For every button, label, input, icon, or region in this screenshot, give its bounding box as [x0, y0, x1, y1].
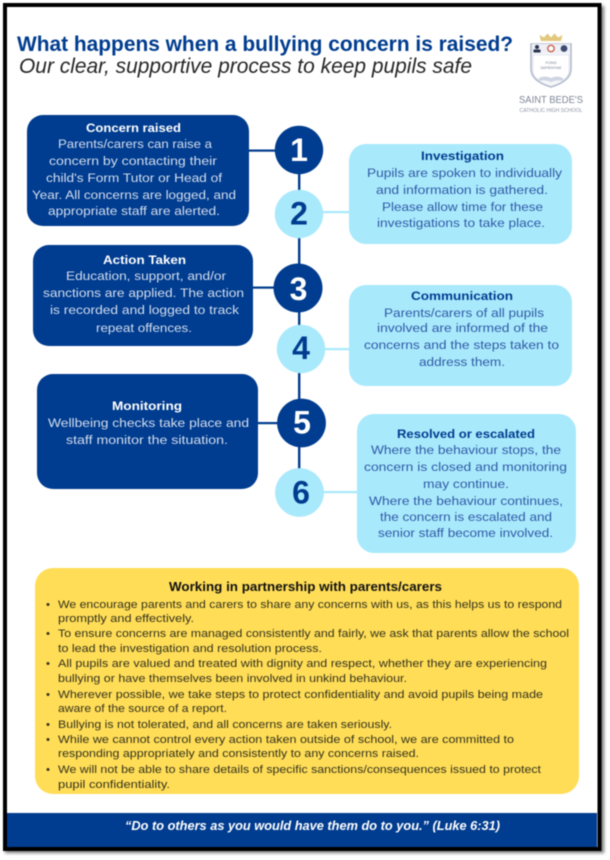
panel: resolved or escalated: Where the behaviour stops, the: [371, 443, 561, 457]
step 4: 4: [292, 330, 310, 366]
step 4: [277, 325, 325, 373]
partnership bullet list: Bullying is not tolerated, and all concerns are taken seriously.: [58, 719, 392, 731]
panel: concern raised: [27, 115, 249, 226]
school logo: [519, 34, 583, 114]
partnership bullet list: bullying or have themselves been involved in unkind behaviour.: [58, 673, 407, 685]
partnership bullet list: pupil confidentiality.: [58, 779, 170, 791]
panel: resolved or escalated: concern is closed and monitoring: [364, 460, 567, 474]
partnership bullet list: We will not be able to share details of specific sanctions/consequences issued to protect: [58, 764, 542, 776]
partnership bullet list: •: [46, 764, 50, 776]
partnership bullet list: Wherever possible, we take steps to protect confidentiality and avoid pupils being made: [58, 689, 543, 701]
partnership bullet list: to lead the investigation and resolution process.: [58, 643, 322, 655]
panel: communication: Communication: [411, 289, 513, 303]
step 3: 3: [290, 271, 307, 307]
partnership bullet list: •: [46, 734, 50, 746]
partnership bullet list: •: [46, 719, 50, 731]
step 2: [275, 190, 323, 238]
panel: monitoring: Monitoring: [112, 399, 182, 413]
partnership bullet list: •: [46, 658, 50, 670]
panel: concern raised: Year. All concerns are logged, and: [32, 188, 236, 202]
step 1: [275, 126, 323, 174]
panel: monitoring: Wellbeing checks take place and: [48, 416, 249, 430]
panel: resolved or escalated: [357, 414, 576, 553]
panel: communication: address them.: [419, 355, 505, 369]
partnership bullet list: responding appropriately and consistently to any concerns raised.: [58, 748, 419, 760]
step 1: 1: [290, 132, 308, 168]
panel: action taken: Education, support, and/or: [66, 269, 226, 283]
step 6: 6: [292, 474, 310, 510]
panel: concern raised: appropriate staff are alerted.: [48, 204, 220, 218]
partnership bullet list: aware of the source of a report.: [58, 703, 227, 715]
partnership bullet list: •: [46, 689, 50, 701]
subtitle: Our clear, supportive process to keep pupils safe: [19, 55, 472, 78]
panel: concern raised: concern by contacting their: [49, 154, 217, 168]
partnership bullet list: [46, 599, 569, 791]
panel: concern raised: Concern raised: [86, 121, 181, 135]
partnership bullet list: •: [46, 599, 50, 611]
panel: communication: involved are informed of the: [377, 321, 548, 335]
panel: resolved or escalated: Resolved or escalated: [397, 427, 535, 441]
step 3: [274, 264, 322, 312]
panel: resolved or escalated: may continue.: [423, 477, 509, 491]
panel: investigation: [349, 144, 572, 244]
panel: communication: [349, 285, 572, 386]
panel: action taken: is recorded and logged to track: [50, 303, 240, 317]
partnership bullet list: All pupils are valued and treated with dignity and respect, whether they are experiencing: [58, 658, 547, 670]
panel: resolved or escalated: senior staff become involved.: [378, 526, 553, 540]
school logo: SAINT BEDE'S: [519, 95, 583, 106]
partnership bullet list: promptly and effectively.: [58, 613, 194, 625]
panel: action taken: Action Taken: [103, 253, 186, 267]
panel: resolved or escalated: the concern is escalated and: [380, 510, 552, 524]
panel: working in partnership: [35, 568, 579, 794]
panel: action taken: sanctions are applied. The action: [43, 286, 244, 300]
title: What happens when a bullying concern is raised?: [17, 32, 513, 56]
panel: investigation: investigations to take place.: [377, 216, 545, 230]
panel: monitoring: [37, 374, 258, 489]
panel: resolved or escalated: Where the behaviour continues,: [369, 494, 563, 508]
school logo: CATHOLIC HIGH SCHOOL: [520, 108, 583, 114]
panel: concern raised: child's Form Tutor or Head of: [46, 171, 223, 185]
partnership bullet list: We encourage parents and carers to share any concerns with us, as this helps us to respond: [58, 599, 562, 611]
step 5: [277, 399, 326, 447]
step 6: [275, 468, 324, 517]
school logo: SAPIENTIAE: [540, 66, 562, 70]
panel: monitoring: staff monitor the situation.: [66, 433, 228, 447]
panel: action taken: [33, 245, 253, 346]
panel: communication: concerns and the steps taken to: [364, 338, 559, 352]
panel: investigation: Pupils are spoken to individually: [367, 166, 563, 180]
panel: concern raised: Parents/carers can raise a: [58, 137, 212, 151]
panel: investigation: Investigation: [421, 149, 504, 163]
partnership bullet list: •: [46, 628, 50, 640]
panel: investigation: and information is gathered.: [376, 183, 548, 197]
panel: communication: Parents/carers of all pupils: [384, 306, 544, 320]
footer band with quote: “Do to others as you would have them do to you.” (Luke 6:31): [125, 819, 500, 833]
timeline connector: [248, 150, 358, 493]
panel: investigation: Please allow time for these: [382, 200, 543, 214]
step 2: 2: [290, 196, 308, 232]
school logo: FONS: [545, 60, 557, 65]
partnership heading: Working in partnership with parents/carers: [169, 580, 442, 594]
step 5: 5: [293, 404, 311, 440]
footer band with quote: [7, 813, 597, 847]
partnership bullet list: To ensure concerns are managed consistently and fairly, we ask that parents allow the school: [58, 628, 569, 640]
partnership bullet list: While we cannot control every action taken outside of school, we are committed to: [58, 734, 514, 746]
panel: action taken: repeat offences.: [96, 321, 192, 335]
